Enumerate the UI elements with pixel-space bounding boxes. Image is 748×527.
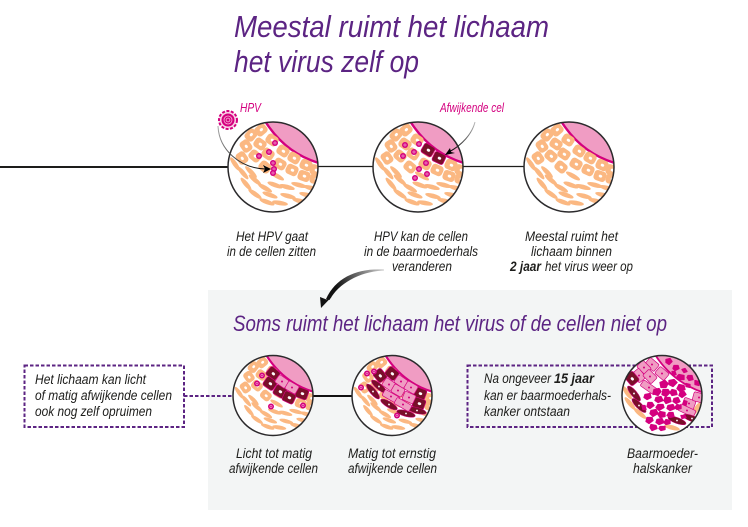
circle: HPV enters cells: [227, 121, 319, 213]
caption: cervical cancer: halskanker: [633, 461, 692, 476]
label: abnormal cell: Afwijkende cel: [439, 101, 505, 115]
callout: cancer after about 15 years: kanker ontstaan: [484, 404, 570, 419]
arrow: curved down to lower panel: [320, 269, 384, 308]
caption: HPV enters cells: [227, 229, 316, 259]
caption: moderate to severe: afwijkende cellen: [348, 461, 437, 476]
callout: cancer after about 15 years: [468, 366, 712, 427]
circle: mild to moderate abnormal cells: [232, 354, 314, 436]
callout: body can clear mild abnormal cells: ook nog zelf opruimen: [35, 404, 152, 419]
caption: HPV can change cells: HPV kan de cellen: [374, 229, 468, 244]
arrow: HPV to cell: [218, 126, 271, 173]
caption: body clears virus: Meestal ruimt het: [525, 229, 619, 244]
callout: body can clear mild abnormal cells: of matig afwijkende cellen: [35, 388, 172, 403]
icon: HPV virus: [219, 111, 237, 129]
label: HPV: HPV: [240, 101, 262, 115]
caption: moderate to severe: [348, 446, 437, 476]
caption: mild to moderate: Licht tot matig: [236, 446, 312, 461]
caption: body clears virus: het virus weer op: [545, 259, 633, 274]
panel: grey background: [208, 290, 732, 510]
callout: cancer after about 15 years: 15 jaar: [554, 371, 595, 386]
caption: body clears virus: 2 jaar: [509, 259, 542, 274]
timeline: top connecting line: [0, 166, 525, 168]
callout: cancer after about 15 years: kan er baarmoederhals-: [484, 388, 611, 403]
caption: cervical cancer: Baarmoeder-: [627, 446, 698, 461]
caption: HPV can change cells: [364, 229, 478, 274]
caption: mild to moderate: afwijkende cellen: [229, 461, 318, 476]
circle: moderate to severe abnormal cells: [351, 354, 433, 436]
callout: cancer after about 15 years: Na ongeveer: [484, 371, 551, 386]
callout: body can clear mild abnormal cells: [24, 366, 184, 427]
arrow: abnormal cell: [445, 122, 475, 155]
caption: body clears virus: lichaam binnen: [531, 244, 612, 259]
callout: body can clear mild abnormal cells: Het lichaam kan licht: [35, 372, 147, 387]
caption: cervical cancer: [627, 446, 698, 476]
title: Meestal ruimt het lichaam: [234, 9, 549, 44]
title: [234, 9, 549, 79]
caption: HPV enters cells: Het HPV gaat: [236, 229, 309, 244]
caption: mild to moderate: [229, 446, 318, 476]
caption: HPV can change cells: in de baarmoederhals: [364, 244, 478, 259]
connector: between lower circles: [312, 395, 353, 397]
caption: body clears virus: [509, 229, 633, 274]
connector: callout to circle: [184, 395, 232, 397]
caption: HPV can change cells: veranderen: [392, 259, 452, 274]
caption: moderate to severe: Matig tot ernstig: [348, 446, 436, 461]
title: het virus zelf op: [234, 44, 419, 79]
circle: cervical cancer: [621, 354, 703, 436]
subheading: Soms ruimt het lichaam het virus of de cellen niet op: [233, 311, 667, 336]
caption: HPV enters cells: in de cellen zitten: [227, 244, 316, 259]
circle: HPV can change cells: [372, 121, 464, 213]
circle: body clears virus: [523, 121, 615, 213]
